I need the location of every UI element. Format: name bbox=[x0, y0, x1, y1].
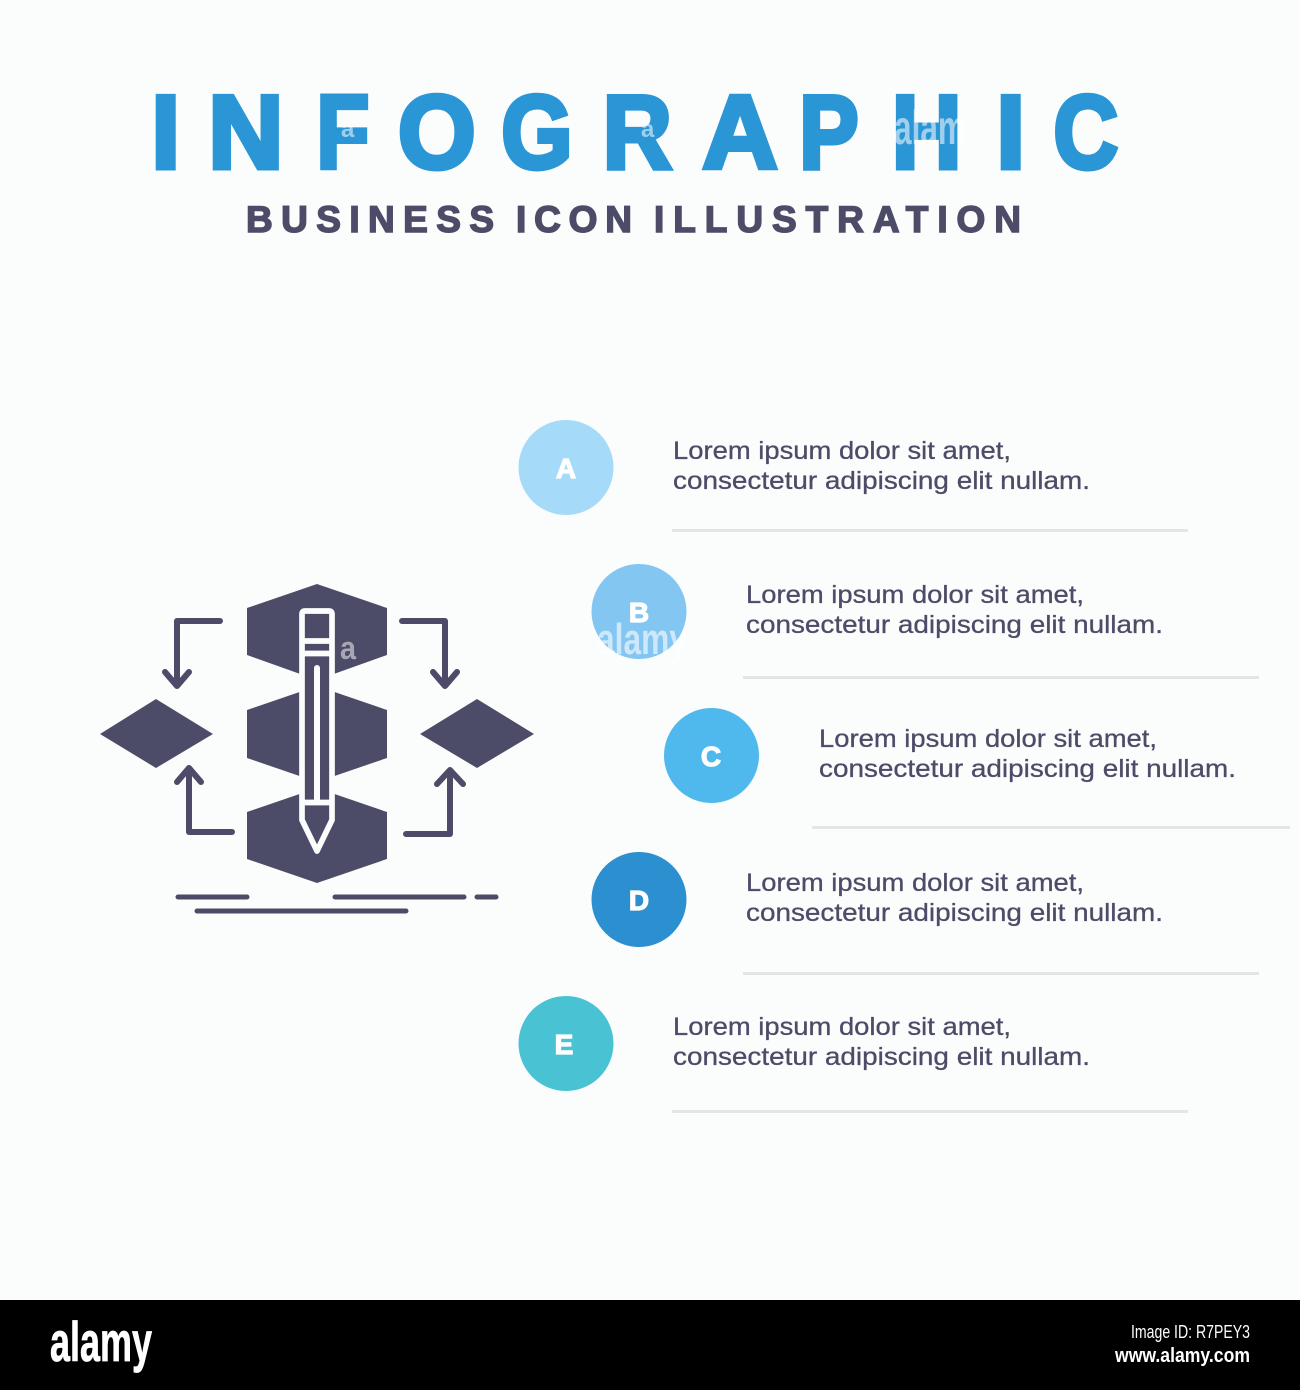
badge E bbox=[518, 996, 614, 1091]
item D bbox=[592, 852, 1163, 947]
footer bar bbox=[0, 1300, 1300, 1390]
icon: algorithm flowchart with pencil bbox=[100, 584, 534, 911]
title: a bbox=[341, 116, 355, 143]
title: A bbox=[702, 75, 778, 191]
icon: three hexagons bbox=[247, 584, 387, 883]
title: G bbox=[501, 74, 573, 190]
badge A bbox=[518, 420, 614, 515]
badge D: D bbox=[629, 885, 649, 916]
icon: ground lines bbox=[178, 897, 496, 911]
badge B: alamy bbox=[597, 615, 687, 664]
icon: four flow arrows bbox=[165, 621, 463, 834]
title: F bbox=[316, 74, 369, 191]
subtitle bbox=[246, 199, 1021, 240]
badge E: E bbox=[555, 1029, 573, 1060]
title: C bbox=[1054, 74, 1118, 191]
title: H bbox=[892, 75, 962, 191]
footer url: www.alamy.com bbox=[1114, 1345, 1250, 1367]
watermark on icon: a bbox=[340, 630, 356, 666]
item E bbox=[518, 996, 1090, 1091]
text E: Lorem ipsum dolor sit amet, bbox=[673, 1013, 1011, 1041]
text C: Lorem ipsum dolor sit amet, bbox=[819, 725, 1157, 753]
text D: consectetur adipiscing elit nullam. bbox=[746, 899, 1163, 927]
subtitle: ILLUSTRATION bbox=[654, 199, 1021, 240]
text D: Lorem ipsum dolor sit amet, bbox=[746, 869, 1084, 897]
title bbox=[151, 73, 1118, 191]
badge D bbox=[592, 852, 686, 947]
item B bbox=[592, 564, 1163, 664]
icon: left and right diamonds bbox=[100, 699, 534, 768]
subtitle: BUSINESS bbox=[246, 199, 494, 240]
badge B bbox=[592, 564, 687, 664]
icon: pencil bbox=[302, 611, 332, 851]
text A: consectetur adipiscing elit nullam. bbox=[673, 467, 1090, 495]
text A: Lorem ipsum dolor sit amet, bbox=[673, 437, 1011, 465]
title: a bbox=[641, 116, 655, 143]
footer logo: alamy bbox=[50, 1310, 152, 1373]
text C: consectetur adipiscing elit nullam. bbox=[819, 755, 1236, 783]
subtitle: ICON bbox=[516, 199, 632, 240]
item A bbox=[518, 420, 1090, 515]
item C bbox=[664, 708, 1236, 803]
title: N bbox=[208, 75, 283, 191]
title: R bbox=[603, 75, 672, 191]
badge C: C bbox=[701, 741, 721, 772]
title: I bbox=[996, 75, 1025, 191]
text B: Lorem ipsum dolor sit amet, bbox=[746, 581, 1084, 609]
footer image id: Image ID: R7PEY3 bbox=[1131, 1322, 1250, 1342]
text B: consectetur adipiscing elit nullam. bbox=[746, 611, 1163, 639]
text E: consectetur adipiscing elit nullam. bbox=[673, 1043, 1090, 1071]
title: alam bbox=[894, 102, 966, 155]
badge A: A bbox=[556, 453, 576, 484]
title: P bbox=[799, 73, 859, 191]
title: O bbox=[398, 74, 476, 190]
title: I bbox=[151, 75, 180, 191]
badge C bbox=[664, 708, 759, 803]
badge B: B bbox=[629, 597, 649, 628]
